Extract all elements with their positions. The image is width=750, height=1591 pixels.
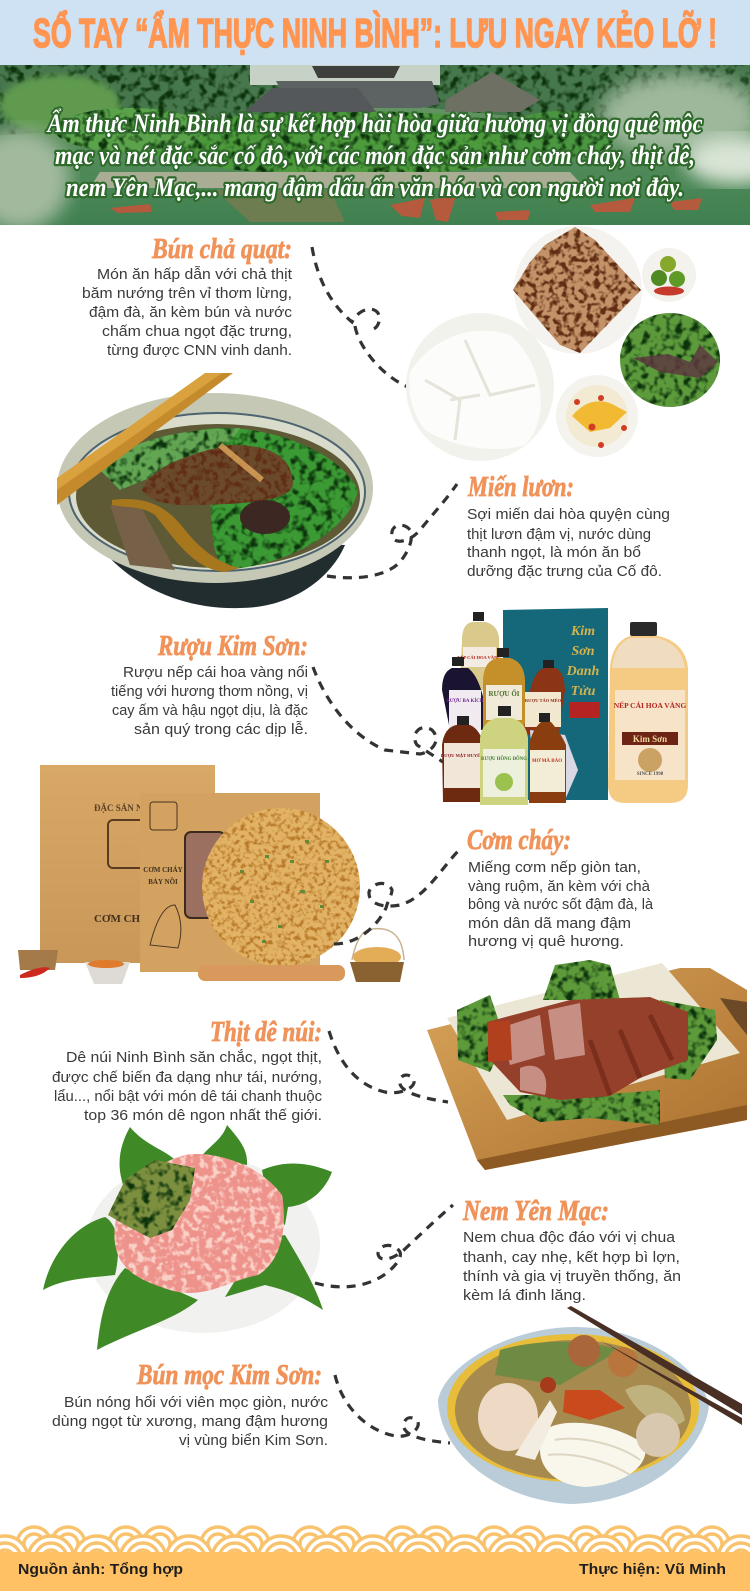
small front bottles: MƠ MÀ BẢO: [532, 758, 562, 764]
footer: [0, 1524, 750, 1591]
white plate under pork: [514, 226, 642, 354]
dark eel strips: [110, 505, 175, 570]
wooden board: [198, 965, 345, 981]
chili oil: [563, 1390, 625, 1420]
author credit: Thực hiện: Vũ Minh: [579, 1561, 726, 1578]
section: Cơm cháy: [18, 765, 654, 984]
green leaves: [43, 1125, 332, 1350]
cutting board: [427, 968, 747, 1170]
bowl: [95, 540, 345, 608]
photo: Kim Son rice wine bottles: [441, 608, 688, 805]
description: tiếng với hương thơm nồng, vị: [111, 684, 308, 700]
banner scenery: [0, 65, 750, 230]
vegetables and herbs: [495, 1342, 620, 1385]
dashed arrow: [329, 1031, 448, 1102]
product box: BẢY NỒI: [148, 878, 178, 886]
floss basket: [350, 929, 404, 982]
description: top 36 món dê ngon nhất thế giới.: [84, 1108, 322, 1124]
photo: Bun moc noodle bowl: [438, 1306, 742, 1504]
intro text: [46, 109, 703, 202]
section: Bún mọc Kim Sơn: [52, 1306, 742, 1504]
description: Dê núi Ninh Bình săn chắc, ngọt thịt,: [66, 1049, 322, 1066]
description: [463, 1230, 681, 1304]
section: Bún chả quạt: [82, 226, 720, 461]
description: bông và nước sốt đậm đà, là: [468, 897, 654, 913]
section: Nem Yên Mạc: [43, 1125, 681, 1350]
goat meat slices: [487, 997, 688, 1100]
description: [82, 266, 292, 359]
description: Sợi miến dai hòa quyện cùng: [467, 507, 670, 523]
dashed arrow: [327, 484, 457, 578]
large bottle: Kim Sơn: [633, 734, 667, 744]
description: sản quý trong các dịp lễ.: [134, 721, 308, 738]
description: hương vị quê hương.: [468, 934, 624, 950]
description: [468, 860, 654, 950]
sliced herbs: [108, 1160, 195, 1238]
teal gift box: Sơn: [571, 644, 595, 659]
heading: Nem Yên Mạc:: [462, 1196, 609, 1227]
wave pattern: [0, 1524, 750, 1553]
teal gift box: Tửu: [571, 684, 596, 699]
plate: [447, 963, 740, 1120]
description: dưỡng đặc trưng của Cố đô.: [467, 564, 662, 580]
crispy rice cake: [202, 808, 360, 966]
description: Nem chua độc đáo với vị chua: [463, 1230, 676, 1246]
red-brown bottle: RƯỢU TÁO MÈO: [525, 698, 562, 703]
bowl: [438, 1327, 709, 1504]
description: [111, 665, 308, 738]
dark purple bottle: RƯỢU BA KÍCH: [446, 698, 484, 704]
back bottle: [457, 612, 501, 690]
section: Thịt dê núi: [52, 960, 747, 1170]
product box: [140, 793, 320, 972]
small front bottles: RƯỢU MẬT HUYẾT: [441, 753, 483, 758]
pork balls and fish cake: [478, 1383, 538, 1451]
dashed arrow: [335, 1375, 450, 1443]
dashed arrow: [315, 1205, 453, 1287]
dashed arrow: [334, 850, 459, 944]
amber bottle: [483, 648, 525, 735]
description: được chế biến đa dạng như tái, nướng,: [52, 1070, 322, 1086]
description: [52, 1049, 322, 1124]
large bottle: NẾP CÁI HOA VÀNG: [614, 700, 686, 710]
paper bag: [40, 765, 215, 963]
small front bottles: RƯỢU HỒNG ĐÔNG: [481, 756, 527, 762]
large bottle: [608, 622, 688, 803]
photo: Yen Mac fermented pork on leaves: [43, 1125, 332, 1350]
header band: [0, 0, 750, 65]
description: cay ấm và hậu ngọt dịu, là đặc: [112, 703, 308, 719]
description: thanh, cay nhẹ, kết hợp bì lợn,: [463, 1250, 680, 1266]
section: Rượu Kim Sơn: [111, 608, 688, 805]
chili and bowl garnish: [18, 950, 130, 984]
white plate: [86, 1157, 320, 1333]
chopped herbs: [200, 428, 358, 570]
dark purple bottle: [442, 657, 488, 730]
pink nem strands: [114, 1154, 284, 1293]
herbs: [457, 960, 717, 1125]
description: chấm chua ngọt đặc trưng,: [102, 324, 292, 340]
description: [52, 1395, 328, 1449]
dashed arrow: [313, 667, 443, 762]
amber bottle: RƯỢU ỐI: [488, 690, 520, 698]
rice noodle plate: [406, 313, 554, 461]
description: kèm lá đinh lăng.: [463, 1288, 586, 1304]
small front bottles: [441, 706, 578, 805]
paper bag: ĐẶC SẢN NI: [94, 803, 146, 813]
description: món dân dã mang đậm: [468, 916, 631, 932]
description: [467, 507, 670, 580]
description: thính và gia vị truyền thống, ăn: [463, 1269, 681, 1285]
description: Miếng cơm nếp giòn tan,: [468, 860, 641, 876]
mushroom: [240, 500, 290, 534]
description: vị vùng biển Kim Sơn.: [179, 1433, 328, 1449]
description: thịt lươn đậm vị, nước dùng: [467, 527, 651, 543]
teal gift box: Kim: [570, 624, 595, 639]
photo: crispy rice packaging: [18, 765, 404, 984]
description: đậm đà, ăn kèm bún và nước: [89, 305, 292, 321]
rice noodles: [540, 1423, 646, 1487]
photo: eel glass noodle bowl: [57, 373, 373, 608]
heading: Miến lươn:: [467, 472, 574, 503]
description: băm nướng trên vỉ thơm lừng,: [82, 286, 292, 302]
banner: Ninh Binh landscape with intro text: [0, 65, 750, 230]
chopsticks: [567, 1306, 742, 1425]
dashed arrow: [312, 247, 408, 387]
heading: Bún mọc Kim Sơn:: [136, 1360, 322, 1391]
chopsticks: [57, 373, 222, 496]
teal gift box: [503, 608, 608, 800]
description: lẩu..., nổi bật với món dê tái chanh thuộc: [54, 1089, 322, 1105]
description: Bún nóng hổi với viên mọc giòn, nước: [64, 1395, 328, 1411]
eel topping: [142, 445, 293, 505]
heading: Bún chả quạt:: [151, 234, 292, 265]
description: Món ăn hấp dẫn với chả thịt: [97, 266, 292, 283]
section: Miến lươn: [57, 373, 670, 608]
description: dùng ngọt từ xương, mang đậm hương: [52, 1414, 328, 1430]
heading: Cơm cháy:: [467, 825, 571, 856]
photo: grilled pork and sides platter: [406, 226, 720, 461]
lime dish: [642, 248, 696, 302]
back bottle: NẾP CÁI HOA VÀNG: [457, 655, 501, 660]
description: từng được CNN vinh danh.: [107, 343, 292, 359]
heading: Thịt dê núi:: [210, 1017, 322, 1048]
photo: goat meat on wooden board: [427, 960, 747, 1170]
dipping sauce bowl: [556, 375, 638, 457]
large bottle: SINCE 1998: [637, 772, 664, 777]
source credit: Nguồn ảnh: Tổng hợp: [18, 1561, 183, 1578]
description: Rượu nếp cái hoa vàng nổi: [123, 665, 308, 681]
fresh herbs: [620, 313, 720, 407]
grilled pork patties: [513, 227, 641, 353]
product box: CƠM CHÁY: [143, 866, 183, 874]
description: thanh ngọt, là món ăn bổ: [467, 545, 641, 561]
description: vàng ruộm, ăn kèm với chà: [468, 879, 651, 895]
heading: Rượu Kim Sơn:: [157, 631, 308, 662]
red-brown bottle: [523, 660, 565, 735]
paper bag: CƠM CHÁY: [94, 913, 156, 925]
teal gift box: Danh: [566, 664, 600, 679]
